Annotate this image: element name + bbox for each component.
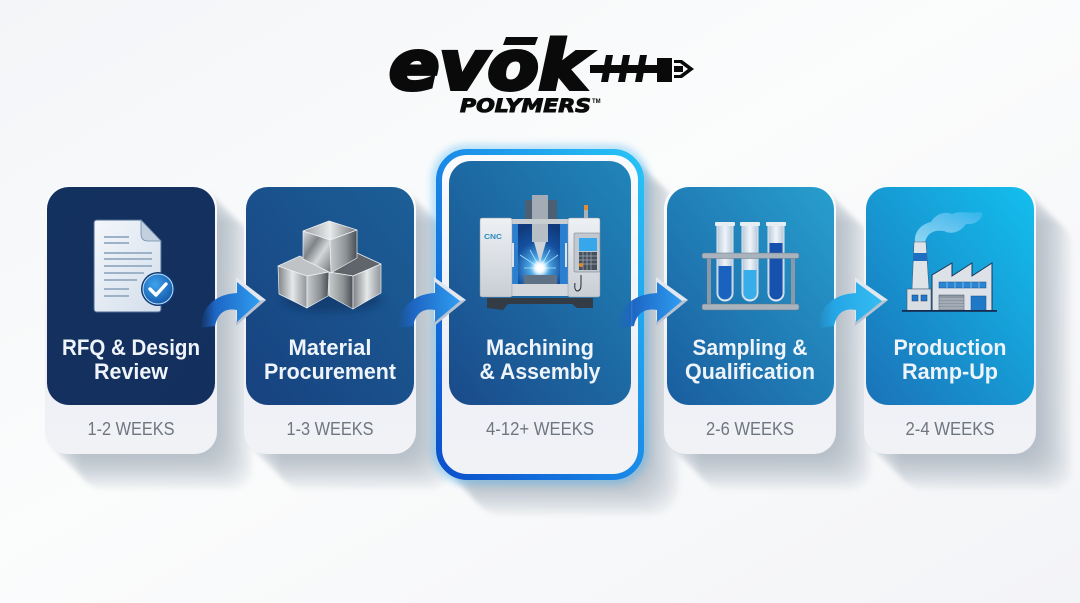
logo macron (503, 37, 538, 45)
step title: Ramp-Up (902, 359, 998, 384)
step title: Machining (486, 335, 594, 360)
step title: Production (894, 335, 1006, 360)
arrow: step 2 to step 3 (398, 277, 466, 328)
step title: Qualification (685, 359, 815, 384)
logo: evok polymers (389, 27, 694, 117)
panel: machining and assembly (highlighted) (436, 149, 644, 480)
duration: 2-4 WEEKS (906, 419, 994, 439)
step title: Sampling & (692, 335, 808, 360)
arrow: step 4 to step 5 (818, 277, 888, 328)
arrow: step 3 to step 4 (617, 277, 688, 328)
logo screw icon (590, 55, 694, 82)
panel: RFQ and design review (45, 186, 217, 454)
logo wordmark: evok (389, 27, 592, 106)
step title: Review (94, 359, 169, 384)
panel: sampling and qualification (664, 186, 836, 454)
trademark: TM (592, 99, 601, 105)
panel: material procurement (244, 186, 416, 454)
step title: Procurement (264, 359, 397, 384)
duration: 2-6 WEEKS (706, 419, 794, 439)
duration: 4-12+ WEEKS (486, 419, 594, 439)
icon: document with check (94, 220, 175, 312)
arrow: step 1 to step 2 (200, 277, 266, 328)
step title: Material (288, 335, 372, 360)
CNC label: CNC (484, 232, 503, 241)
icon: factory (902, 212, 997, 312)
icon: test tubes in rack (702, 222, 799, 310)
step title: RFQ & Design (62, 335, 200, 360)
panel: production ramp-up (864, 186, 1036, 454)
icon: CNC machine (480, 195, 600, 310)
duration: 1-3 WEEKS (286, 419, 374, 439)
logo subtitle: POLYMERS (460, 95, 591, 117)
icon: metal cubes (278, 221, 382, 312)
duration: 1-2 WEEKS (88, 419, 174, 439)
step title: & Assembly (480, 359, 601, 384)
